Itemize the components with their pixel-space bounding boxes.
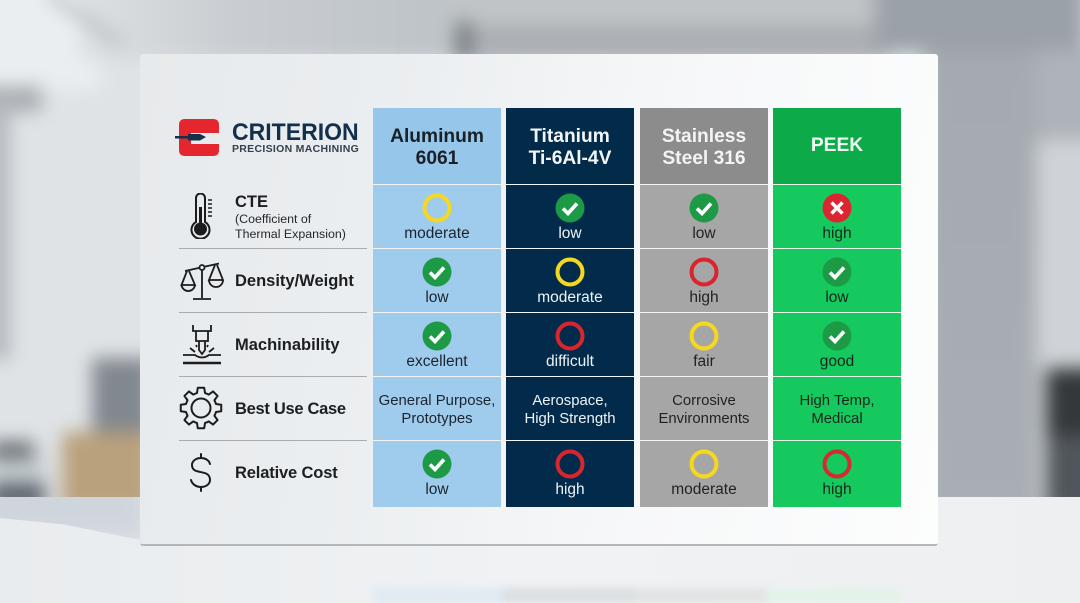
- tagline: PRECISION MACHINING: [232, 143, 359, 155]
- header: Ti-6Al-4V: [529, 148, 611, 168]
- Cost: moderate: moderate: [671, 481, 737, 498]
- Use case: General Purpose, Prototypes: Prototypes: [401, 410, 473, 426]
- Machinability: excellent: [373, 313, 501, 376]
- icon: milling tool: [183, 325, 221, 364]
- column: PEEK: [773, 108, 901, 507]
- shadow on table: [0, 497, 140, 540]
- Machinability label: Machinability: [235, 336, 340, 354]
- Density: low: low: [425, 289, 449, 306]
- icon: red C with tool: [175, 119, 219, 156]
- column: Stainless Steel 316: [640, 108, 768, 507]
- Use case: Aerospace, High Strength: High Strength: [524, 410, 616, 426]
- row label: Best Use Case: [180, 386, 346, 430]
- CTE: moderate: moderate: [404, 225, 470, 242]
- header: [506, 108, 634, 184]
- Relative Cost label: Relative Cost: [235, 464, 338, 482]
- Density/Weight label: Density/Weight: [235, 272, 354, 290]
- Density: low: low: [825, 289, 849, 306]
- header: [773, 108, 901, 184]
- Density: low: [773, 249, 901, 312]
- row label: Density/Weight: [180, 262, 354, 300]
- Use case: Corrosive Environments: [640, 377, 768, 440]
- Cost: high: high: [822, 481, 852, 498]
- Machinability: fair: fair: [693, 353, 715, 370]
- Density: low: [373, 249, 501, 312]
- panel: comparison card: [140, 54, 938, 546]
- Cost: high: [773, 441, 901, 507]
- row label: CTE: [190, 193, 346, 241]
- Use case: Corrosive Environments: Corrosive: [672, 392, 736, 408]
- CTE: low: [640, 185, 768, 248]
- Use case: Aerospace, High Strength: [506, 377, 634, 440]
- logo: Criterion Precision Machining: [175, 119, 359, 156]
- header: Stainless: [662, 126, 746, 146]
- Use case: Corrosive Environments: Environments: [658, 410, 750, 426]
- CTE: low: low: [558, 225, 582, 242]
- icon: dollar sign: [190, 453, 211, 492]
- Machinability: good: good: [820, 353, 854, 370]
- Cost: low: [373, 441, 501, 507]
- CTE description: Thermal Expansion): [235, 227, 346, 241]
- row label: Relative Cost: [190, 453, 338, 492]
- Density: high: high: [689, 289, 719, 306]
- Density: moderate: [506, 249, 634, 312]
- header: PEEK: [811, 135, 863, 156]
- header: Aluminum: [390, 126, 484, 146]
- CTE title: CTE: [235, 193, 268, 211]
- CTE: low: [506, 185, 634, 248]
- Density: moderate: moderate: [537, 289, 603, 306]
- CTE: high: [773, 185, 901, 248]
- header: [640, 108, 768, 184]
- Machinability: fair: [640, 313, 768, 376]
- card reflection: [373, 588, 901, 603]
- Use case: Aerospace, High Strength: Aerospace,: [532, 392, 608, 408]
- column: Aluminum 6061: [373, 108, 501, 507]
- Best Use Case label: Best Use Case: [235, 400, 346, 418]
- Cost: low: low: [425, 481, 449, 498]
- brand name: CRITERION: [232, 119, 359, 146]
- CTE description: (Coefficient of: [235, 212, 311, 226]
- Use case: High Temp, Medical: High Temp,: [799, 392, 875, 408]
- Cost: high: [506, 441, 634, 507]
- CTE: moderate: [373, 185, 501, 248]
- Cost: high: high: [555, 481, 585, 498]
- CTE description: [235, 212, 346, 241]
- CTE: low: low: [692, 225, 716, 242]
- Cost: moderate: [640, 441, 768, 507]
- CTE: high: high: [822, 225, 852, 242]
- Use case: High Temp, Medical: [773, 377, 901, 440]
- column: Titanium Ti-6Al-4V: [506, 108, 634, 507]
- Machinability: difficult: difficult: [546, 353, 594, 370]
- icon: balance scale: [180, 262, 224, 300]
- Machinability: good: [773, 313, 901, 376]
- Use case: General Purpose, Prototypes: [373, 377, 501, 440]
- header: Titanium: [530, 126, 610, 146]
- Use case: General Purpose, Prototypes: General Purpose,: [379, 392, 495, 408]
- header: [373, 108, 501, 184]
- Density: high: [640, 249, 768, 312]
- table surface: [0, 497, 1080, 603]
- icon: thermometer: [190, 193, 212, 239]
- Machinability: excellent: excellent: [406, 353, 468, 370]
- header: Steel 316: [662, 148, 746, 168]
- icon: gear: [180, 386, 222, 430]
- header: 6061: [416, 148, 458, 168]
- Use case: High Temp, Medical: Medical: [811, 410, 863, 426]
- Machinability: difficult: [506, 313, 634, 376]
- row label: Machinability: [183, 325, 340, 364]
